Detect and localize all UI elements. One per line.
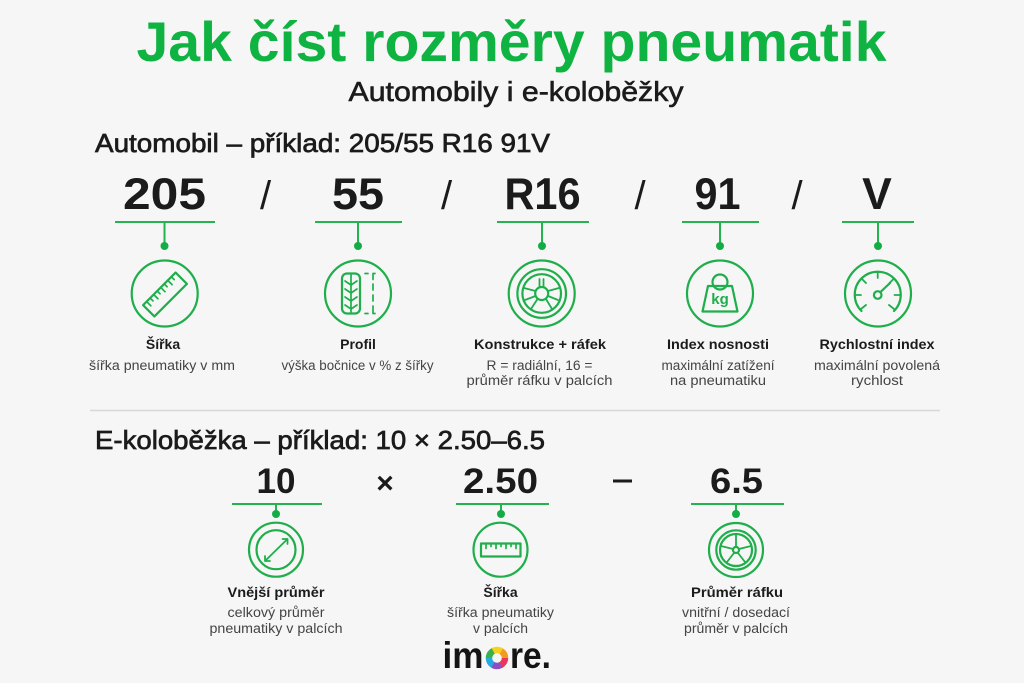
label block: Šířka xyxy=(89,335,235,373)
icon: speedometer xyxy=(845,260,911,326)
label block: Vnější průměr: Vnější průměr xyxy=(228,584,325,600)
label block: Šířka xyxy=(447,583,554,636)
slash: / xyxy=(791,174,803,218)
label block: Šířka: v palcích xyxy=(473,621,528,636)
label block: Rychlostní index: rychlost xyxy=(851,373,903,388)
slash: / xyxy=(260,174,272,218)
label block: Index nosnosti xyxy=(662,336,775,388)
heading: automobil: Automobil – příklad: 205/55 R16 91V xyxy=(95,128,551,158)
icon: horizontal ruler xyxy=(474,523,528,577)
icon: weight kg xyxy=(687,260,753,326)
icon: outer diameter xyxy=(249,523,303,577)
number 6.5: 6.5 xyxy=(710,462,763,501)
heading: e-koloběžka: E-koloběžka – příklad: 10 × 2.50–6.5 xyxy=(95,425,545,455)
label block: Šířka: Šířka xyxy=(146,335,180,352)
label block: Profil xyxy=(282,336,434,373)
multiply sign: × xyxy=(376,467,394,500)
label block: Šířka: šířka pneumatiky xyxy=(447,605,554,620)
number 91: 91 xyxy=(694,170,740,219)
number 55: 55 xyxy=(332,170,384,219)
number R16: R16 xyxy=(504,170,580,219)
label block: Index nosnosti: maximální zatížení xyxy=(662,358,775,373)
label block: Index nosnosti: Index nosnosti xyxy=(667,336,769,352)
label block: Průměr ráfku xyxy=(682,584,790,636)
icon: tyre profile xyxy=(325,260,391,326)
icon: wheel rim xyxy=(509,260,575,326)
label block: Konstrukce + ráfek: R = radiální, 16 = xyxy=(486,358,593,373)
label block: Konstrukce + ráfek: průměr ráfku v palcích xyxy=(466,373,612,388)
connectors: scooter xyxy=(232,504,784,518)
label block: Rychlostní index xyxy=(814,336,941,388)
label block: Rychlostní index: maximální povolená xyxy=(814,358,941,373)
label block: Šířka: šířka pneumatiky v mm xyxy=(89,358,235,373)
label block: Průměr ráfku: průměr v palcích xyxy=(684,621,788,636)
logo: imore xyxy=(442,635,551,676)
icon: ruler xyxy=(132,260,198,326)
logo: imore: im xyxy=(442,635,484,676)
label block: Průměr ráfku: Průměr ráfku xyxy=(691,584,783,600)
label block: Šířka: Šířka xyxy=(483,583,518,600)
title: Jak číst rozměry pneumatik xyxy=(136,10,887,73)
label block: Průměr ráfku: vnitřní / dosedací xyxy=(682,605,790,620)
label block: Konstrukce + ráfek: Konstrukce + ráfek xyxy=(474,336,606,352)
subtitle: Automobily i e-koloběžky xyxy=(348,76,684,107)
letter V: V xyxy=(862,170,892,219)
connectors: car xyxy=(115,222,914,250)
panel: scooter tyre code xyxy=(256,462,763,501)
label block: Vnější průměr: pneumatiky v palcích xyxy=(210,621,342,636)
number 205: 205 xyxy=(123,170,206,219)
icon: weight kg: kg xyxy=(711,291,729,308)
panel: car tyre code xyxy=(123,170,892,219)
label block: Rychlostní index: Rychlostní index xyxy=(820,336,935,352)
dash xyxy=(613,480,632,482)
label block: Profil: Profil xyxy=(340,336,376,352)
icon: rim diameter xyxy=(709,523,763,577)
label block: Index nosnosti: na pneumatiku xyxy=(670,373,766,388)
number 10: 10 xyxy=(256,462,296,501)
slash: / xyxy=(634,174,646,218)
number 2.50: 2.50 xyxy=(463,462,538,501)
logo: imore: re. xyxy=(510,635,551,676)
label block: Konstrukce + ráfek xyxy=(466,336,612,388)
slash: / xyxy=(441,174,453,218)
label block: Profil: výška bočnice v % z šířky xyxy=(282,358,434,373)
label block: Vnější průměr: celkový průměr xyxy=(228,605,325,620)
label block: Vnější průměr xyxy=(210,584,342,636)
